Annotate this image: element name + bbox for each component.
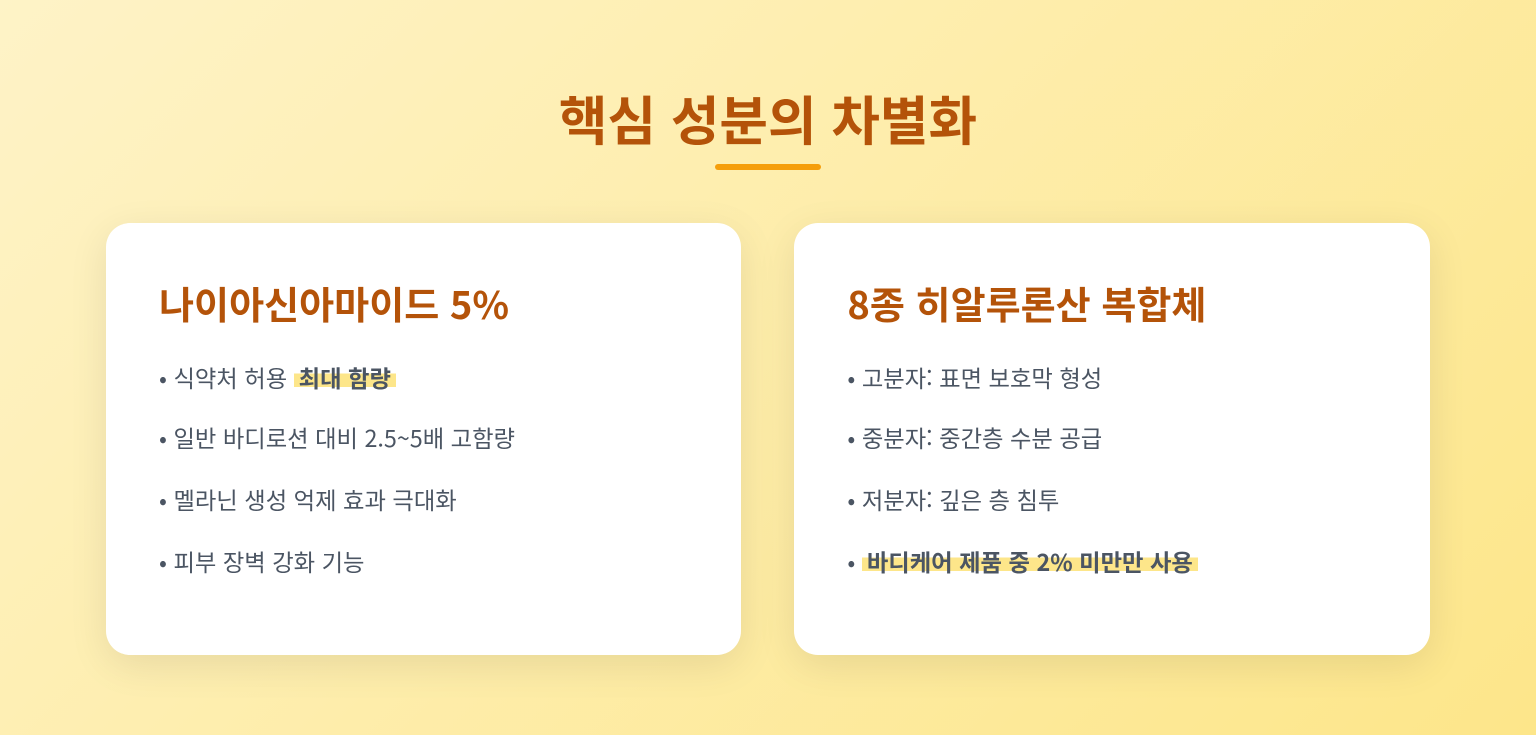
bullet: melanin suppression: • 멜라닌 생성 억제 효과 극대화 — [159, 482, 457, 516]
bullet: maximum allowed: • 식약처 허용 최대 함량 — [159, 360, 391, 394]
bullet: skin barrier: • 피부 장벽 강화 기능 — [159, 544, 364, 578]
bullet: low molecular: • 저분자: 깊은 층 침투 — [847, 482, 1059, 516]
panel heading: hyaluronic acid: 8종 히알루론산 복합체 — [847, 275, 1206, 330]
bullet: medium molecular: • 중분자: 중간층 수분 공급 — [847, 420, 1102, 454]
panel: niacinamide — [106, 223, 741, 655]
bullet: high molecular: • 고분자: 표면 보호막 형성 — [847, 360, 1102, 394]
bullet: rarity highlight: • 바디케어 제품 중 2% 미만만 사용 — [847, 544, 1193, 578]
panel heading: niacinamide: 나이아신아마이드 5% — [159, 275, 509, 330]
panel: hyaluronic acid — [794, 223, 1430, 655]
bullet: higher content: • 일반 바디로션 대비 2.5~5배 고함량 — [159, 420, 515, 454]
title underline accent — [715, 164, 821, 170]
title: 핵심 성분의 차별화 — [559, 80, 977, 156]
